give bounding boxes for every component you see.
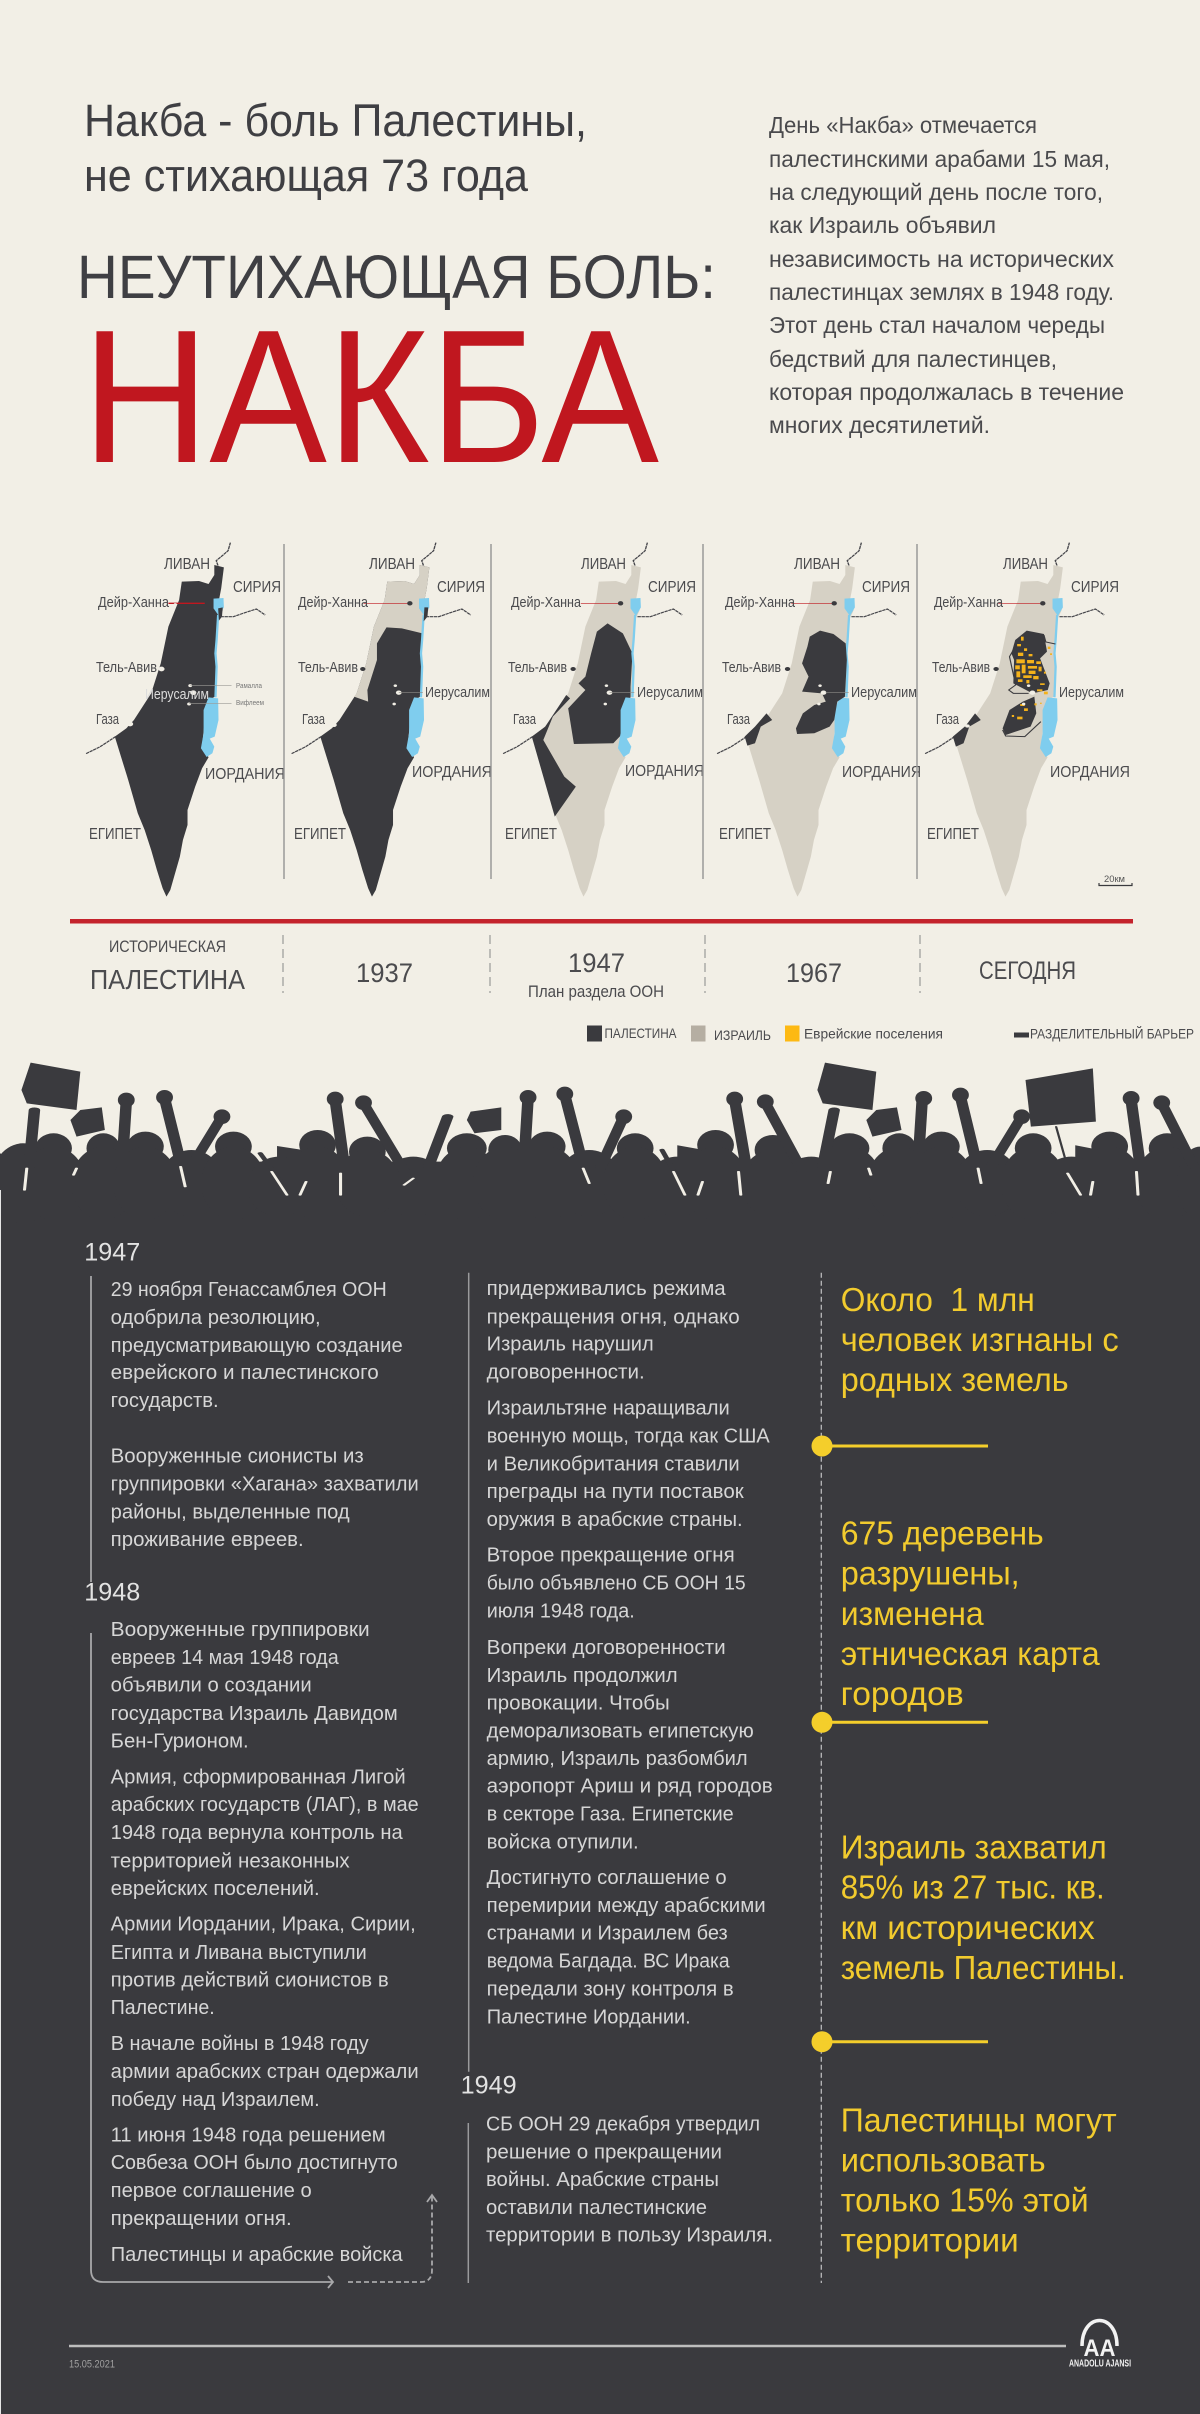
text block: 1948 continued: деморализовать египетскую <box>487 1720 754 1742</box>
text block: 1948 continued: перемирии между арабскими <box>487 1895 766 1917</box>
map: 1947 partition plan <box>503 543 704 897</box>
text block: 1948 continued: и Великобритания ставили <box>487 1453 740 1475</box>
text block: 1948 continued: ведома Багдада. ВС Ирака <box>487 1950 731 1972</box>
fact: 675 villages destroyed <box>841 1514 1100 1712</box>
map: 1947 partition plan: Дейр-Ханна <box>511 594 582 611</box>
map: historic Palestine <box>86 543 285 897</box>
map: today: Иерусалим <box>1059 684 1124 701</box>
scale bar <box>1099 874 1132 886</box>
map: today: СИРИЯ <box>1071 579 1119 596</box>
text block: 1948: первое соглашение о <box>111 2180 312 2202</box>
fact: 15 percent usable: только 15% этой <box>841 2182 1089 2219</box>
map: historic Palestine: Газа <box>96 711 119 728</box>
map: historic Palestine: Дейр-Ханна <box>98 594 170 611</box>
text block: 1947: 29 ноября Генассамблея ООН <box>111 1279 387 1301</box>
text block: 1948 continued: Достигнуто соглашение о <box>487 1867 727 1889</box>
intro text: на следующий день после того, <box>769 179 1103 205</box>
text block: 1948 continued: Израиль продолжил <box>487 1665 678 1687</box>
map: historic Palestine: Вифлеем <box>236 700 264 707</box>
fact: 15 percent usable <box>841 2102 1117 2259</box>
text block: 1947: проживание евреев. <box>111 1529 304 1551</box>
intro text: независимость на исторических <box>769 246 1115 272</box>
fact: 675 villages destroyed: разрушены, <box>841 1554 1020 1591</box>
text block: 1948: Армии Иордании, Ирака, Сирии, <box>111 1914 416 1936</box>
text block: 1949: оставили палестинские <box>486 2197 707 2219</box>
map: 1937: СИРИЯ <box>437 579 485 596</box>
map: today: ЛИВАН <box>1003 556 1048 573</box>
text block: 1949: войны. Арабские страны <box>486 2169 719 2191</box>
text block: 1947: еврейского и палестинского <box>111 1362 379 1384</box>
text block: 1948 continued: аэропорт Ариш и ряд городов <box>487 1776 773 1798</box>
text block: 1947: государств. <box>111 1390 219 1412</box>
timeline labels under maps <box>90 937 1076 1001</box>
intro text: многих десятилетий. <box>769 412 990 438</box>
text block: 1948 continued: придерживались режима <box>487 1278 727 1300</box>
map: 1947 partition plan: Тель-Авив <box>508 659 567 676</box>
arrow: 1948 column flow <box>91 1633 437 2288</box>
text block: 1948: прекращении огня. <box>111 2208 292 2230</box>
legend: ПАЛЕСТИНА <box>604 1025 677 1041</box>
timeline labels under maps: 1947 <box>568 948 625 978</box>
fact: 1 million expelled: человек изгнаны с <box>841 1321 1119 1358</box>
map: 1937: ИОРДАНИЯ <box>412 764 492 781</box>
map: today: ИОРДАНИЯ <box>1050 764 1130 781</box>
text block: 1948: 1948 года вернула контроль на <box>111 1822 404 1844</box>
intro text: палестинскими арабами 15 мая, <box>769 146 1110 172</box>
text block: 1948: армии арабских стран одержали <box>111 2061 419 2083</box>
text block: 1948 continued: оружия в арабские страны. <box>487 1509 743 1531</box>
fact: 1 million expelled: Около 1 млн <box>841 1281 1035 1318</box>
fact: 1 million expelled <box>841 1281 1119 1398</box>
map: 1937 <box>292 543 492 897</box>
legend: Еврейские поселения <box>804 1026 943 1042</box>
text block: 1948: Совбеза ООН было достигнуто <box>111 2152 398 2174</box>
map: historic Palestine: Тель-Авив <box>96 659 157 676</box>
map: 1937: Иерусалим <box>425 684 490 701</box>
text block: 1948 continued: Палестине Иордании. <box>487 2006 691 2028</box>
dark panel left edge <box>0 1190 1 2414</box>
map: 1967: ЛИВАН <box>794 556 840 573</box>
map: 1967: Иерусалим <box>851 684 917 701</box>
map: 1967 <box>717 543 921 897</box>
map: historic Palestine: СИРИЯ <box>233 579 281 596</box>
year 1949: 1949 <box>461 2071 517 2099</box>
icon: Anadolu Agency logo <box>1069 2320 1131 2370</box>
text block: 1947: предусматривающую создание <box>111 1335 403 1357</box>
map: 1947 partition plan: Газа <box>513 711 536 728</box>
subtitle: не стихающая 73 года <box>84 150 529 201</box>
map: 1967: Дейр-Ханна <box>725 594 796 611</box>
settlements <box>1012 637 1052 719</box>
map: historic Palestine: Иерусалим <box>145 686 209 703</box>
legend: ИЗРАИЛЬ <box>714 1027 771 1043</box>
intro text: как Израиль объявил <box>769 212 996 238</box>
timeline labels under maps: План раздела ООН <box>528 982 664 1001</box>
subtitle: Накба - боль Палестины, <box>84 95 587 146</box>
fact: 675 villages destroyed: этническая карта <box>841 1635 1100 1672</box>
text block: 1948 continued: провокации. Чтобы <box>487 1692 670 1714</box>
fact: 85 percent seized: км исторических <box>841 1909 1095 1946</box>
scale bar: 20км <box>1104 874 1125 884</box>
text block: 1947: одобрила резолюцию, <box>111 1307 321 1329</box>
text block: 1949: решение о прекращении <box>486 2141 722 2163</box>
map: 1947 partition plan: ИОРДАНИЯ <box>625 763 704 780</box>
timeline labels under maps: ПАЛЕСТИНА <box>90 964 245 995</box>
fact: 85 percent seized: земель Палестины. <box>841 1949 1126 1986</box>
text block: 1948 continued: войска отупили. <box>487 1831 639 1853</box>
fact: 675 villages destroyed: 675 деревень <box>841 1514 1044 1551</box>
legend <box>587 1024 1194 1043</box>
text block: 1948: еврейских поселений. <box>111 1878 320 1900</box>
text block: 1948: Египта и Ливана выступили <box>111 1942 367 1964</box>
map: historic Palestine: Рамалла <box>236 683 262 690</box>
intro text: День «Накба» отмечается <box>769 112 1037 138</box>
text block: 1948: Палестине. <box>111 1997 215 2019</box>
map: 1967: ЕГИПЕТ <box>719 826 771 843</box>
date: 15.05.2021 <box>69 2359 115 2371</box>
map: 1947 partition plan: Иерусалим <box>637 684 703 701</box>
timeline labels under maps: СЕГОДНЯ <box>979 957 1076 985</box>
map: 1947 partition plan: ЕГИПЕТ <box>505 826 557 843</box>
text block: 1948: Палестинцы и арабские войска <box>111 2244 404 2266</box>
text block: 1948 continued: Израильтяне наращивали <box>487 1397 730 1419</box>
text block: 1948 continued: июля 1948 года. <box>487 1600 635 1622</box>
icon: Anadolu Agency logo: ANADOLU AJANSI <box>1069 2359 1131 2370</box>
map: 1967: Газа <box>727 711 750 728</box>
timeline labels under maps: 1967 <box>786 958 842 988</box>
text block: 1948: 11 июня 1948 года решением <box>111 2125 386 2147</box>
icon: Anadolu Agency logo: AA <box>1084 2335 1116 2362</box>
text block: 1948 continued: Израиль нарушил <box>487 1334 654 1356</box>
timeline labels under maps: ИСТОРИЧЕСКАЯ <box>109 937 226 956</box>
map: 1947 partition plan: СИРИЯ <box>648 579 696 596</box>
map: 1947 partition plan: ЛИВАН <box>581 556 626 573</box>
text block: 1947: районы, выделенные под <box>111 1502 350 1524</box>
fact: 85 percent seized: 85% из 27 тыс. кв. <box>841 1868 1105 1905</box>
map: 1937: Дейр-Ханна <box>298 594 369 611</box>
text block: 1948: государства Израиль Давидом <box>111 1703 398 1725</box>
map: today: ЕГИПЕТ <box>927 826 979 843</box>
map: historic Palestine: ЕГИПЕТ <box>89 826 141 843</box>
fact: 675 villages destroyed: городов <box>841 1675 964 1712</box>
text block: 1948: В начале войны в 1948 году <box>111 2033 369 2055</box>
year 1947: 1947 <box>84 1239 140 1267</box>
map: 1967: СИРИЯ <box>862 579 910 596</box>
dark panel background <box>0 1190 1200 2414</box>
text block: 1948 continued: передали зону контроля в <box>487 1978 734 2000</box>
fact: 15 percent usable: Палестинцы могут <box>841 2102 1117 2139</box>
fact: 85 percent seized <box>841 1828 1126 1986</box>
text block: 1949: территории в пользу Израиля. <box>486 2225 773 2247</box>
main title block <box>77 95 716 503</box>
text block: 1948 continued: в секторе Газа. Египетские <box>487 1804 734 1826</box>
text block: 1948 continued: договоренности. <box>487 1362 645 1384</box>
year 1948: 1948 <box>84 1579 140 1607</box>
intro text <box>769 112 1124 438</box>
red divider <box>70 919 1133 924</box>
map: today: Тель-Авив <box>932 659 990 676</box>
fact: 85 percent seized: Израиль захватил <box>841 1828 1107 1865</box>
text block: 1948 <box>111 1619 419 2266</box>
text block: 1948 continued: странами и Израилем без <box>487 1922 728 1944</box>
text block: 1947: Вооруженные сионисты из <box>111 1446 364 1468</box>
timeline labels under maps: 1937 <box>356 958 413 988</box>
map: historic Palestine: ЛИВАН <box>164 556 210 573</box>
intro text: бедствий для палестинцев, <box>769 346 1057 372</box>
map: today <box>925 543 1130 897</box>
barrier <box>1003 635 1055 737</box>
text block: 1948: евреев 14 мая 1948 года <box>111 1647 340 1669</box>
crowd silhouette <box>0 1063 1200 1223</box>
text block: 1948: территорией незаконных <box>111 1850 350 1872</box>
intro text: Этот день стал началом череды <box>769 312 1105 338</box>
text block: 1948 continued: армию, Израиль разбомбил <box>487 1748 748 1770</box>
fact: 1 million expelled: родных земель <box>841 1361 1069 1398</box>
intro text: которая продолжалась в течение <box>769 379 1124 405</box>
map: 1937: ЛИВАН <box>369 556 415 573</box>
text block: 1947 <box>111 1279 419 1551</box>
text block: 1948 continued: было объявлено СБ ООН 15 <box>487 1572 746 1594</box>
text block: 1948 continued: преграды на пути поставок <box>487 1481 744 1503</box>
text block: 1948: объявили о создании <box>111 1675 312 1697</box>
text block: 1948 continued: военную мощь, тогда как США <box>487 1425 770 1447</box>
heading: Nakba: НАКБА <box>82 291 659 503</box>
map: today: Дейр-Ханна <box>934 594 1004 611</box>
map: 1937: ЕГИПЕТ <box>294 826 346 843</box>
text block: 1948: арабских государств (ЛАГ), в мае <box>111 1794 419 1816</box>
text block: 1948: Армия, сформированная Лигой <box>111 1766 406 1788</box>
intro text: палестинцах землях в 1948 году. <box>769 279 1114 305</box>
fact marker <box>812 2031 988 2052</box>
text block: 1948: победу над Израилем. <box>111 2089 320 2111</box>
text block: 1948: против действий сионистов в <box>111 1970 389 1992</box>
map: 1967: Тель-Авив <box>722 659 781 676</box>
text block: 1947: группировки «Хагана» захватили <box>111 1474 419 1496</box>
fact: 675 villages destroyed: изменена <box>841 1595 984 1632</box>
text block: 1948: Бен-Гурионом. <box>111 1731 249 1753</box>
text block: 1948 continued: прекращения огня, однако <box>487 1306 740 1328</box>
fact: 15 percent usable: территории <box>841 2222 1019 2259</box>
map: today: Газа <box>936 711 959 728</box>
fact: 15 percent usable: использовать <box>841 2142 1046 2179</box>
text block: 1949 <box>486 2114 773 2247</box>
map: 1937: Газа <box>302 711 325 728</box>
heading: НЕУТИХАЮЩАЯ БОЛЬ: <box>77 243 716 311</box>
map: 1937: Тель-Авив <box>298 659 358 676</box>
map: 1967: ИОРДАНИЯ <box>842 764 921 781</box>
text block: 1948 continued <box>487 1278 773 2028</box>
fact marker <box>812 1712 988 1733</box>
subtitle <box>84 95 587 201</box>
fact marker <box>812 1436 988 1456</box>
map: historic Palestine: ИОРДАНИЯ <box>205 766 285 783</box>
text block: 1948 continued: Вопреки договоренности <box>487 1637 726 1659</box>
text block: 1948: Вооруженные группировки <box>111 1619 370 1641</box>
text block: 1949: СБ ООН 29 декабря утвердил <box>486 2114 760 2136</box>
text block: 1948 continued: Второе прекращение огня <box>487 1545 735 1567</box>
